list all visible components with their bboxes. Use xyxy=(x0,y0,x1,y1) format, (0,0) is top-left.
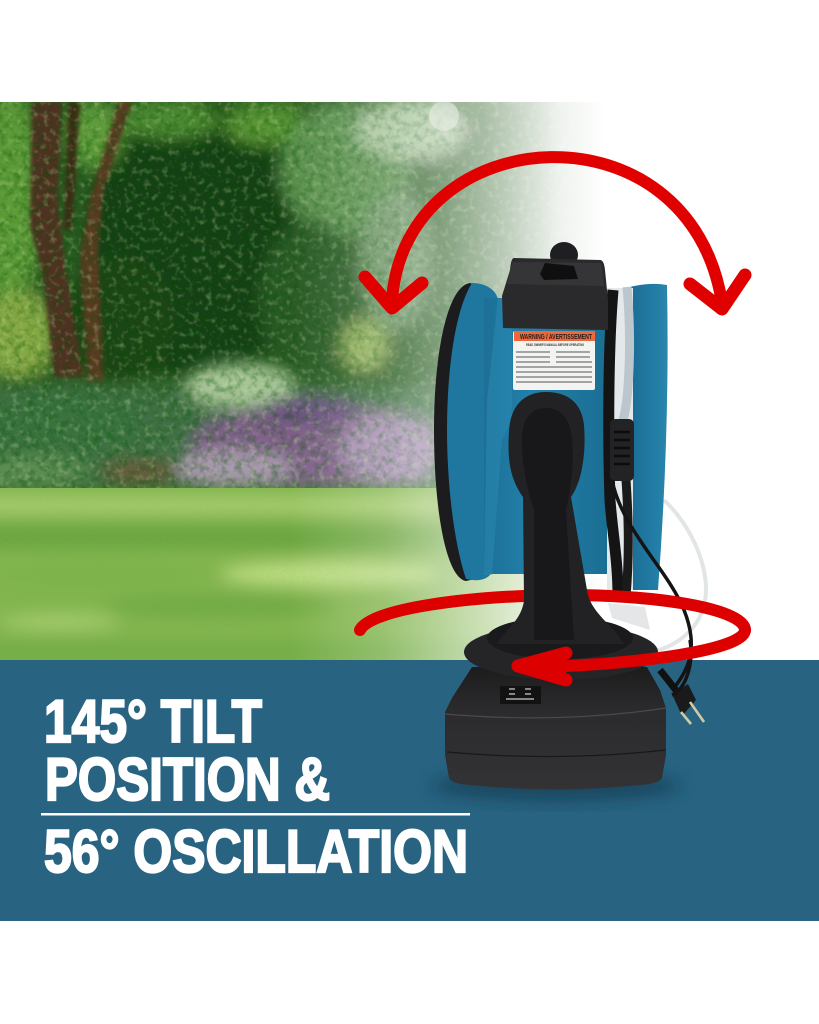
control box xyxy=(502,258,608,330)
oscillation arrow upper arc xyxy=(360,595,745,630)
top tilt arrow xyxy=(365,157,745,309)
stand and base xyxy=(445,392,666,790)
swivel disc xyxy=(464,624,658,680)
base control panel xyxy=(500,686,541,704)
arm xyxy=(497,392,624,644)
tree trunks xyxy=(30,102,132,382)
fan blue body xyxy=(484,298,612,574)
garden photo background xyxy=(0,102,584,660)
rotary switch xyxy=(540,263,578,280)
lens flare bubble xyxy=(429,101,459,131)
clear hose xyxy=(650,500,706,652)
caption divider xyxy=(41,813,470,816)
cord strain relief xyxy=(610,419,634,481)
blue caption band xyxy=(0,660,819,921)
base drop shadow xyxy=(431,770,681,802)
base box xyxy=(445,667,666,790)
oscillation arrow lower arc and head xyxy=(518,630,745,680)
photo texture xyxy=(0,102,470,488)
power plug xyxy=(660,640,704,724)
handle knob xyxy=(550,242,578,268)
clear tube segment xyxy=(623,287,630,420)
line one: 145° TILT xyxy=(44,688,262,755)
coiled black cord xyxy=(609,290,618,596)
warning label: READ OWNER'S MANUAL BEFORE OPERATING xyxy=(526,342,584,347)
warning label xyxy=(513,331,595,390)
white fade xyxy=(308,102,819,660)
line two: POSITION & xyxy=(45,746,330,813)
fan product xyxy=(434,242,691,690)
fan blue front lip xyxy=(447,283,498,580)
fan rear blue ring xyxy=(628,284,668,590)
flower beds xyxy=(0,363,460,488)
body shading xyxy=(484,298,512,575)
sticker tag xyxy=(608,603,650,630)
fan black front ring xyxy=(434,283,480,581)
line three: 56° OSCILLATION xyxy=(44,818,468,885)
infographic canvas xyxy=(0,102,819,921)
warning label: WARNING / AVERTISSEMENT xyxy=(520,332,592,341)
lawn xyxy=(0,488,524,660)
power cord xyxy=(612,480,691,690)
cord channel xyxy=(607,288,633,590)
caption text xyxy=(44,688,468,885)
foliage xyxy=(0,102,473,388)
